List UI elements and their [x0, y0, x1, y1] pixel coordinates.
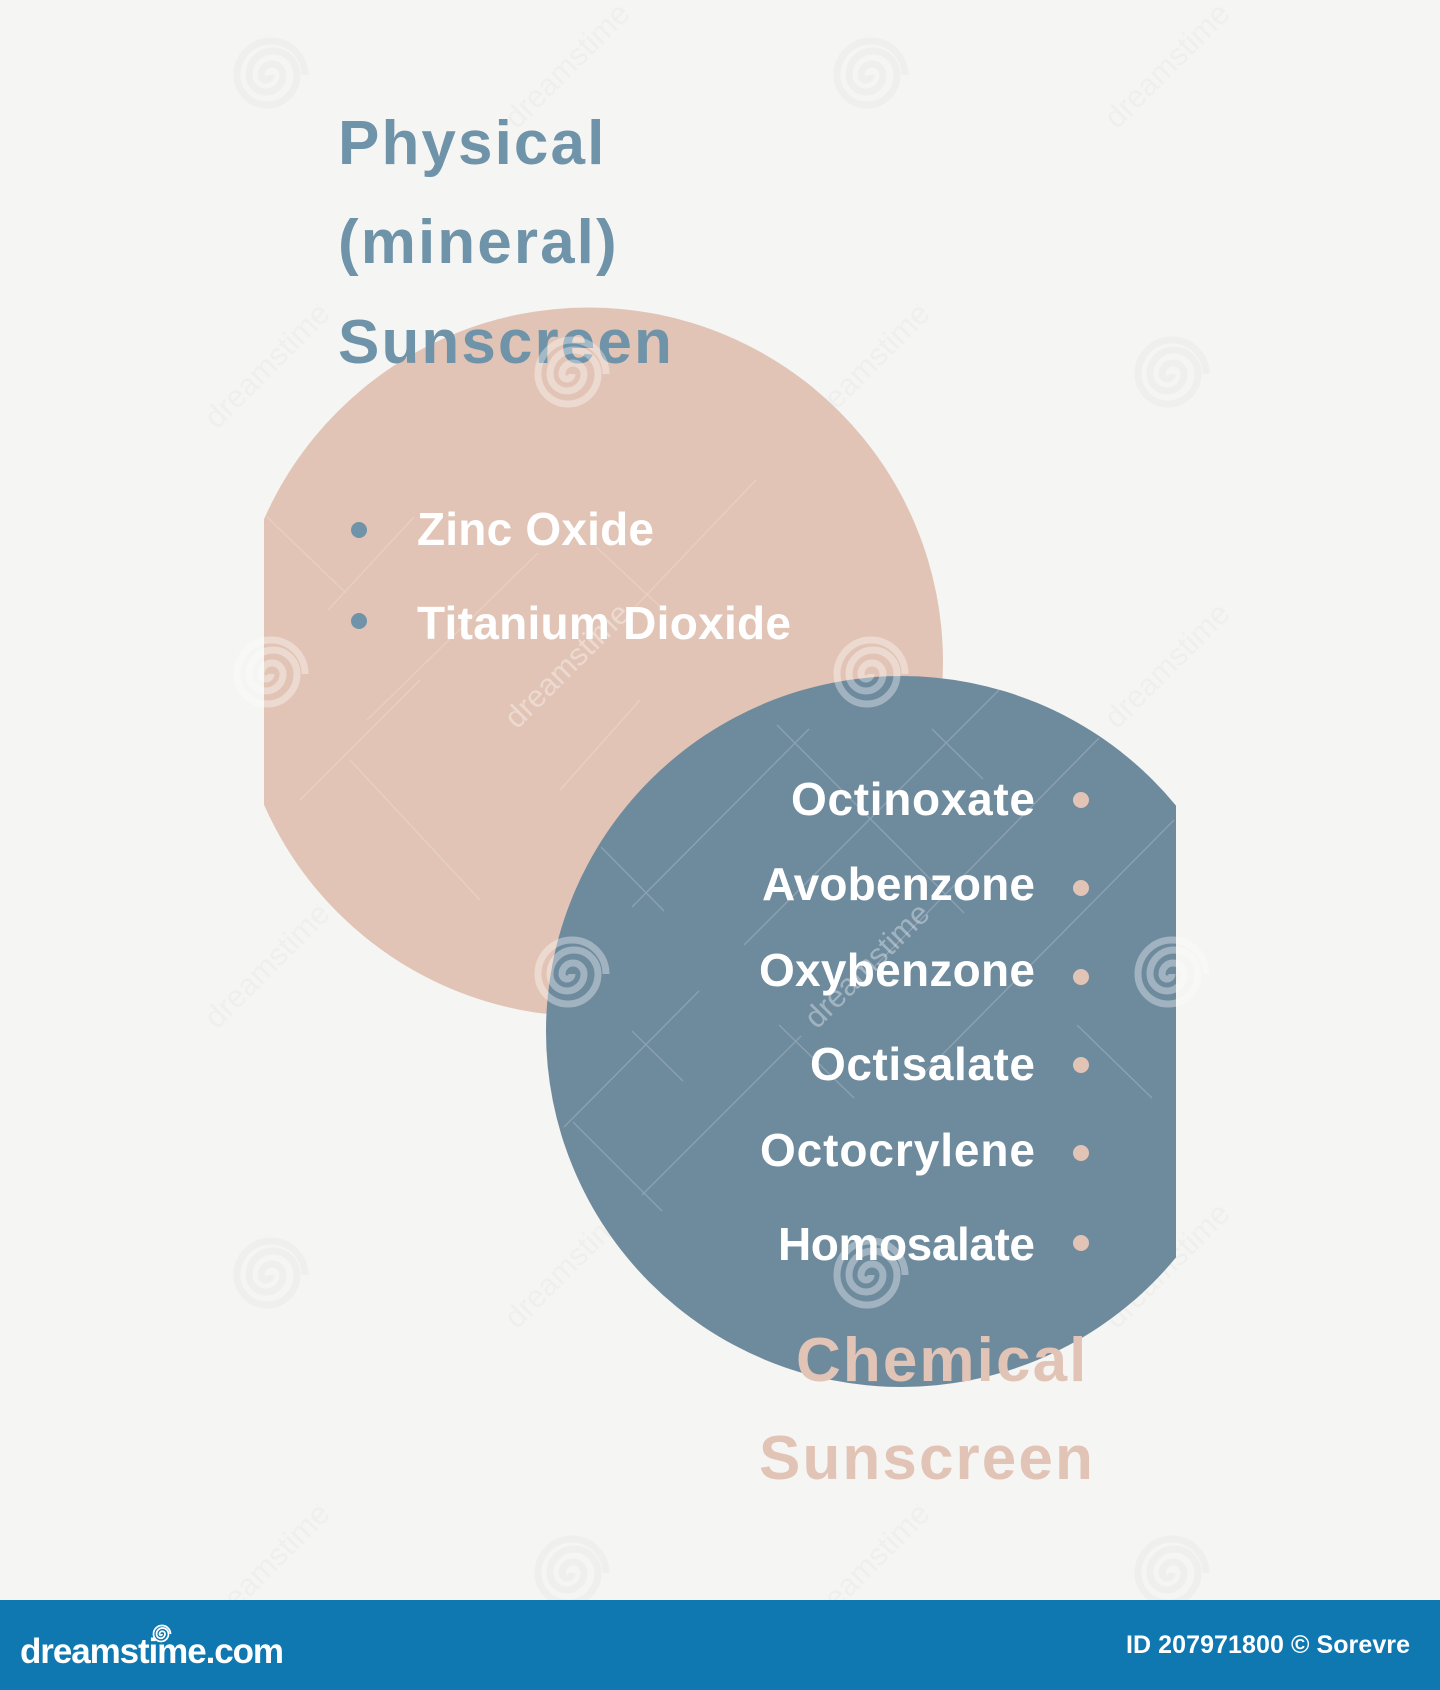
heading: physical (mineral) sunscreen: Physical: [338, 109, 606, 178]
list: chemical sunscreen ingredients: Homosalate: [778, 1218, 1035, 1270]
heading: physical (mineral) sunscreen: [338, 109, 674, 377]
list: chemical sunscreen ingredients: [759, 773, 1089, 1270]
heading: chemical sunscreen: [759, 1326, 1095, 1493]
panel: chemical sunscreen circle: [546, 676, 1176, 1387]
spiral watermarks on shapes: dreamstime: [497, 596, 636, 735]
watermark overlay on shapes: [267, 480, 1174, 1211]
background watermark pattern: dreamstime: [197, 896, 336, 1035]
heading: chemical sunscreen: Chemical: [796, 1326, 1088, 1395]
background watermark pattern: dreamstime: [1097, 596, 1236, 735]
footer logo: dreamstime.com: [20, 1632, 284, 1671]
list: chemical sunscreen ingredients: Octisalate: [810, 1038, 1035, 1090]
heading: chemical sunscreen: Sunscreen: [759, 1424, 1095, 1493]
list: chemical sunscreen ingredients: Avobenzone: [762, 858, 1035, 910]
list: physical sunscreen ingredients: Zinc Oxide: [417, 503, 654, 555]
footer image id and credit: ID 207971800 © Sorevre: [1126, 1631, 1410, 1659]
list: chemical sunscreen ingredients: Octinoxate: [791, 773, 1035, 825]
background watermark pattern: dreamstime: [797, 1496, 936, 1635]
list: chemical sunscreen ingredients: Octocrylene: [760, 1124, 1035, 1176]
heading: physical (mineral) sunscreen: Sunscreen: [338, 308, 674, 377]
background watermark pattern: dreamstime: [797, 296, 936, 435]
spiral watermarks on shapes: [237, 340, 1206, 1305]
heading: physical (mineral) sunscreen: (mineral): [338, 208, 619, 277]
background watermark pattern: dreamstime: [1097, 1196, 1236, 1335]
spiral watermarks on shapes: dreamstime: [797, 896, 936, 1035]
list: physical sunscreen ingredients: [351, 503, 791, 649]
background watermark pattern: dreamstime: [197, 296, 336, 435]
background watermark pattern: dreamstime: [497, 1196, 636, 1335]
panel: physical sunscreen circle: [234, 308, 943, 1016]
background watermark pattern: dreamstime: [197, 1496, 336, 1635]
list: physical sunscreen ingredients: Titanium Dioxide: [417, 597, 791, 649]
background watermark pattern: [197, 0, 1236, 1635]
footer bar: [0, 1600, 1440, 1690]
list: chemical sunscreen ingredients: Oxybenzone: [759, 944, 1035, 996]
